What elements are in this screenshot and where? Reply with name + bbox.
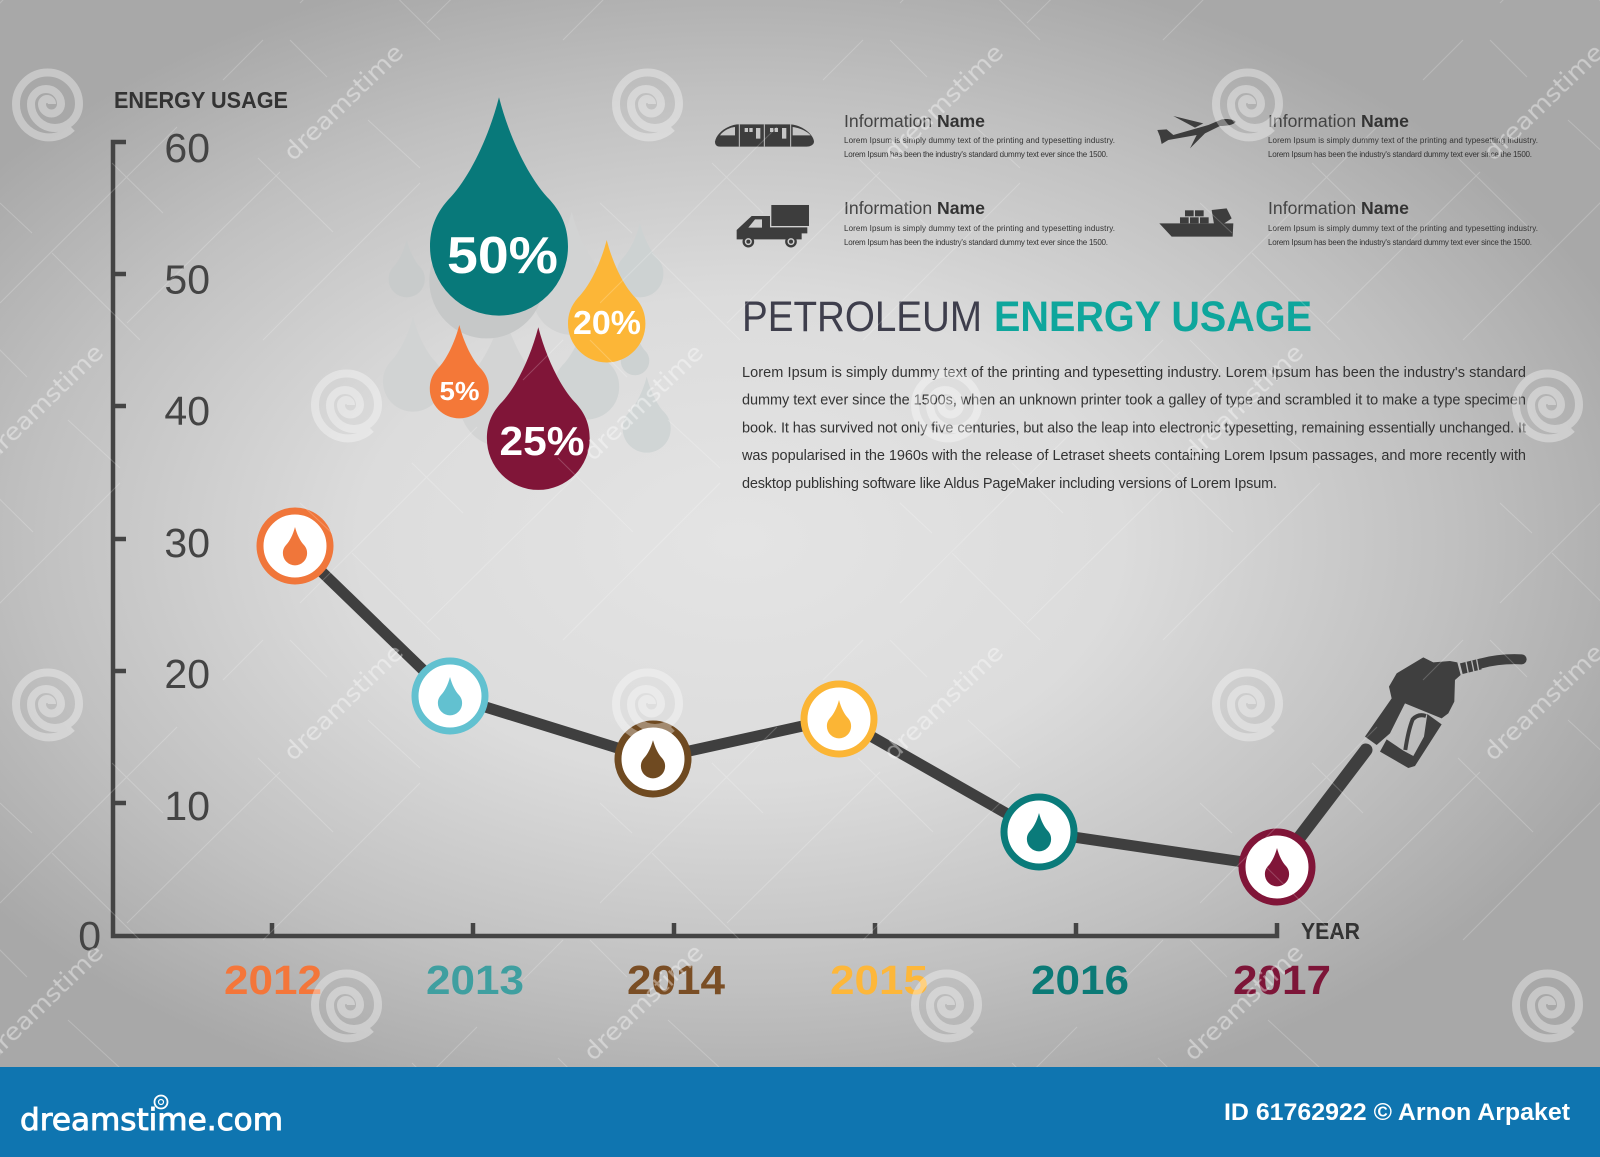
y axis labels: 30 bbox=[164, 520, 210, 566]
y axis title: ENERGY USAGE bbox=[114, 87, 288, 113]
fuel hose line bbox=[1277, 750, 1366, 867]
year labels: 2017 bbox=[1233, 957, 1331, 1003]
marker: 2012 bbox=[260, 511, 330, 581]
drop: 5%: 5% bbox=[440, 376, 480, 406]
watermark text: dreamstime bbox=[1478, 638, 1600, 766]
footer bar: ID 61762922 © Arnon Arpaket bbox=[1224, 1099, 1570, 1126]
body paragraph: was popularised in the 1960s with the release of Letraset sheets containing Lorem Ipsum passages, and more recently with bbox=[741, 448, 1526, 464]
icon: plane bbox=[1157, 116, 1236, 148]
body paragraph: Lorem Ipsum is simply dummy text of the printing and typesetting industry. Lorem Ipsum has been the industry's standard bbox=[742, 365, 1526, 381]
main title: PETROLEUM bbox=[742, 293, 982, 341]
drop: 25% bbox=[487, 327, 590, 490]
info block: truck: Lorem Ipsum is simply dummy text of the printing and typesetting industry. bbox=[844, 224, 1115, 233]
drop: 50% bbox=[430, 97, 568, 316]
main title bbox=[742, 293, 1312, 341]
marker: 2016 bbox=[1004, 797, 1074, 867]
icon: fuel nozzle bbox=[1365, 657, 1522, 768]
marker: 2015 bbox=[804, 684, 874, 754]
year labels: 2012 bbox=[224, 957, 322, 1003]
info block: ship: Lorem Ipsum has been the industry's standard dummy text ever since the 1500. bbox=[1268, 238, 1532, 247]
info block: ship: Information Name bbox=[1268, 198, 1409, 218]
info block: train: Lorem Ipsum is simply dummy text of the printing and typesetting industry. bbox=[844, 136, 1115, 145]
info block: plane: Lorem Ipsum is simply dummy text of the printing and typesetting industry. bbox=[1268, 136, 1538, 145]
y axis labels: 0 bbox=[78, 913, 101, 959]
body paragraph: dummy text ever since the 1500s, when an unknown printer took a galley of type and scrambled it to make a type specimen bbox=[742, 392, 1526, 408]
footer bar bbox=[0, 1067, 1600, 1157]
watermark text: dreamstime bbox=[1178, 938, 1309, 1066]
body paragraph bbox=[741, 365, 1526, 492]
line chart line bbox=[295, 546, 1277, 867]
year labels: 2016 bbox=[1031, 957, 1129, 1003]
info block: truck: Lorem Ipsum has been the industry's standard dummy text ever since the 1500. bbox=[844, 238, 1108, 247]
year labels: 2015 bbox=[830, 957, 928, 1003]
x axis label: YEAR bbox=[1301, 918, 1360, 944]
year labels: 2013 bbox=[426, 957, 524, 1003]
y axis labels: 60 bbox=[164, 125, 210, 171]
body paragraph: book. It has survived not only five centuries, but also the leap into electronic typesetting, remaining essentially unchanged. It bbox=[742, 420, 1526, 436]
info block: train: Lorem Ipsum has been the industry's standard dummy text ever since the 1500. bbox=[844, 150, 1108, 159]
drop: 20%: 20% bbox=[573, 304, 641, 341]
watermark text: dreamstime bbox=[578, 338, 709, 466]
info block: plane bbox=[1268, 111, 1538, 159]
watermark text: dreamstime bbox=[1478, 38, 1600, 166]
watermark text: dreamstime bbox=[278, 38, 409, 166]
y axis labels: 40 bbox=[164, 388, 210, 434]
watermark text: dreamstime bbox=[878, 38, 1009, 166]
watermark text: dreamstime bbox=[578, 938, 709, 1066]
year labels bbox=[224, 957, 1331, 1003]
y axis labels: 50 bbox=[164, 256, 210, 302]
info block: ship: Lorem Ipsum is simply dummy text of the printing and typesetting industry. bbox=[1268, 224, 1538, 233]
info block: truck bbox=[844, 198, 1115, 247]
info block: truck: Information Name bbox=[844, 198, 985, 218]
axes bbox=[113, 142, 1277, 936]
watermark text: dreamstime bbox=[878, 638, 1009, 766]
info block: plane: Lorem Ipsum has been the industry's standard dummy text ever since the 1500. bbox=[1268, 150, 1532, 159]
watermark text: dreamstime bbox=[1178, 338, 1309, 466]
main title: ENERGY USAGE bbox=[994, 293, 1312, 341]
y axis labels: 20 bbox=[164, 651, 210, 697]
marker: 2013 bbox=[415, 661, 485, 731]
footer bar: dreamstime.com bbox=[20, 1103, 283, 1138]
info block: train bbox=[844, 111, 1115, 159]
drop: 5% bbox=[430, 325, 489, 418]
year labels: 2014 bbox=[627, 957, 725, 1003]
marker: 2014 bbox=[618, 724, 688, 794]
y axis labels bbox=[78, 125, 210, 959]
info block: plane: Information Name bbox=[1268, 111, 1409, 131]
marker: 2017 bbox=[1242, 832, 1312, 902]
icon: ship bbox=[1159, 208, 1233, 237]
info block: ship bbox=[1268, 198, 1538, 247]
watermark text: dreamstime bbox=[278, 638, 409, 766]
shadow drops bbox=[383, 157, 671, 453]
info block: train: Information Name bbox=[844, 111, 985, 131]
drop: 20% bbox=[568, 240, 645, 362]
y axis labels: 10 bbox=[164, 783, 210, 829]
drop: 25%: 25% bbox=[500, 418, 584, 464]
icon: train bbox=[715, 124, 814, 147]
drop: 50%: 50% bbox=[447, 227, 558, 285]
icon: truck bbox=[737, 205, 809, 246]
body paragraph: desktop publishing software like Aldus PageMaker including versions of Lorem Ipsum. bbox=[742, 476, 1277, 492]
